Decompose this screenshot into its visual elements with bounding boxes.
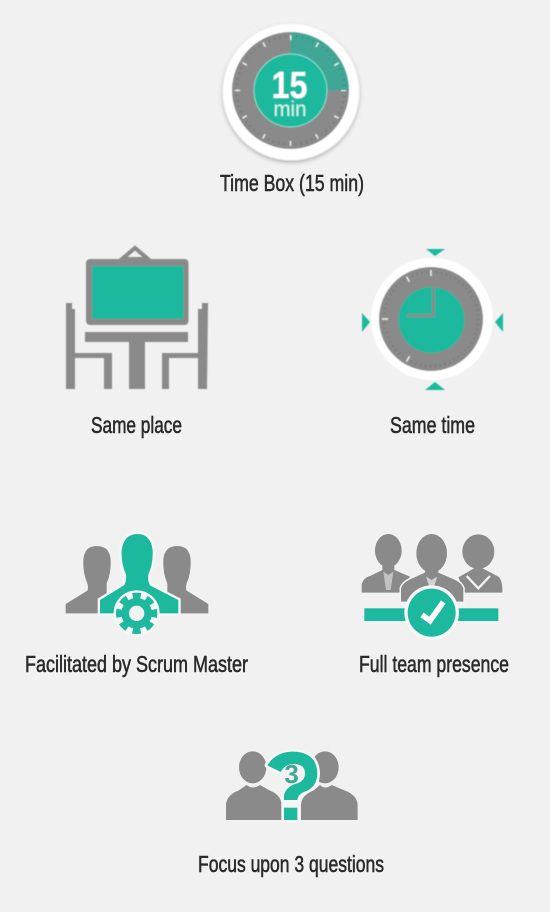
icon: meeting table with board (66, 248, 208, 389)
icon: people with question mark (226, 751, 358, 823)
heading: facilitated by scrum master: Facilitated by Scrum Master (25, 651, 248, 677)
panel: time box (220, 24, 364, 196)
heading: focus upon 3 questions: Focus upon 3 questions (198, 851, 384, 877)
panel: facilitated by scrum master (25, 534, 248, 677)
heading: same place: Same place (91, 412, 182, 438)
panel: same place (66, 248, 208, 438)
heading: time box: Time Box (15 min) (220, 170, 364, 196)
icon: 15 minute timer: min (274, 98, 306, 121)
panel: full team presence (359, 534, 509, 677)
icon: 15 minute timer (223, 24, 359, 160)
numeral 3: 3 (284, 759, 299, 789)
icon: team with gear (66, 534, 208, 633)
icon: clock with arrows (362, 249, 503, 390)
panel: same time (362, 249, 503, 438)
heading: same time: Same time (390, 412, 475, 438)
icon: 15 minute timer: 15 (272, 65, 308, 107)
heading: full team presence: Full team presence (359, 651, 509, 677)
icon: team with check badge (362, 534, 502, 640)
panel: focus upon 3 questions (198, 751, 384, 877)
